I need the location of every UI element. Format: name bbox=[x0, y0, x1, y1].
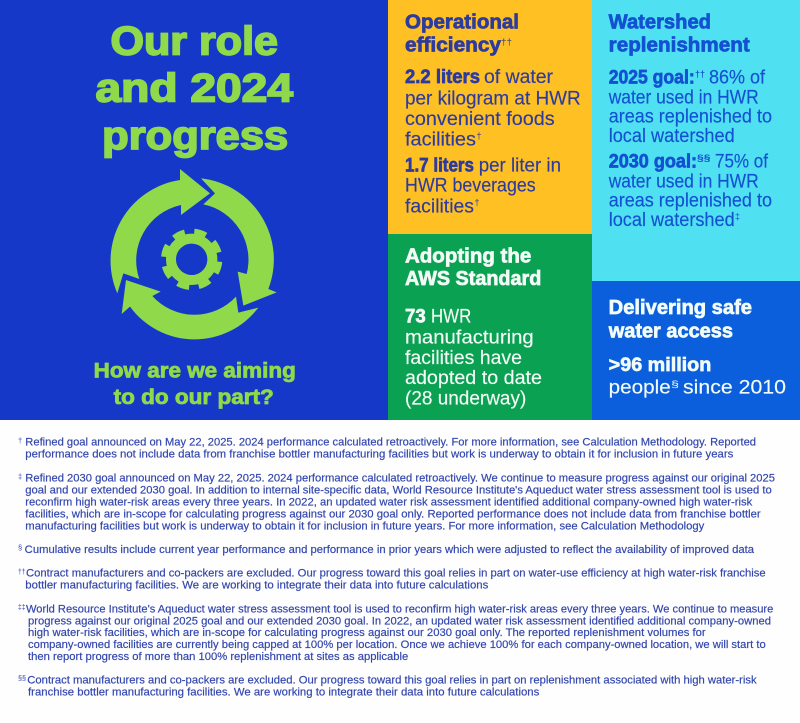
title: progress bbox=[102, 114, 288, 158]
text: people reached bbox=[609, 355, 786, 398]
title bbox=[96, 19, 294, 158]
heading: watershed replenishment bbox=[609, 11, 750, 57]
text: 2030 goal: §§ bbox=[697, 153, 710, 163]
text: facilities adopted: HWR bbox=[431, 306, 471, 327]
footnotes bbox=[18, 436, 775, 698]
footnote: aqueduct tool: World Resource Institute's Aqueduct water stress assessment tool is used to reconfirm high water-risk areas every three years. We continue to measure bbox=[26, 603, 773, 615]
footnote: refined 2030 goal: goal and our extended 2030 goal. In addition to internal site-specific data, World Resource Institute's Aqueduct water stress assessment tool is used to bbox=[25, 484, 772, 496]
text: people reached: § bbox=[671, 379, 679, 389]
text: people reached: >96 million bbox=[609, 355, 711, 376]
footnote: cumulative results: Cumulative results include current year performance and performance in prior years which were adjusted to reflect the availability of improved data bbox=[25, 544, 754, 556]
text: convenient foods metric: per kilogram at HWR bbox=[405, 88, 581, 109]
text: 2030 goal bbox=[608, 151, 772, 231]
heading: watershed replenishment: replenishment bbox=[609, 35, 750, 57]
footnote: contract manufacturers, efficiency bbox=[18, 567, 766, 591]
footnote: cumulative results: § bbox=[18, 543, 22, 552]
heading: adopting the AWS standard: AWS Standard bbox=[405, 268, 541, 290]
footnote: aqueduct tool: ‡‡ bbox=[18, 602, 26, 612]
text: 2030 goal: local watershed bbox=[609, 210, 735, 231]
footnote: refined goal: † bbox=[18, 436, 22, 445]
title: Our role bbox=[110, 19, 278, 63]
text: convenient foods metric: convenient foods bbox=[405, 109, 555, 130]
heading: operational efficiency: efficiency bbox=[405, 35, 502, 57]
icon: left arrow bbox=[111, 169, 210, 293]
footnote: contract manufacturers, replenishment: franchise bottler manufacturing facilities. We are working to integrate their data into future calculations bbox=[28, 686, 539, 698]
text: facilities adopted bbox=[405, 306, 542, 409]
footnote: contract manufacturers, replenishment: Contract manufacturers and co-packers are excluded. Our progress toward this goal relies in part on replenishment associated with high water-risk bbox=[27, 674, 757, 686]
footnote: aqueduct tool: company-owned facilities are currently being capped at 100% per location. Once we achieve 100% for each company-owned location, we will start to bbox=[28, 639, 766, 651]
text: facilities adopted: 73 bbox=[405, 306, 426, 327]
text: convenient foods metric: † bbox=[476, 131, 482, 141]
text: beverages metric: per liter in bbox=[479, 156, 561, 177]
text: facilities adopted: adopted to date bbox=[405, 368, 542, 389]
text: 2030 goal: 75% of bbox=[715, 151, 769, 172]
panel: watershed replenishment bbox=[592, 0, 800, 281]
subheading: How are we aiming bbox=[94, 359, 296, 383]
text: facilities adopted: facilities have bbox=[405, 348, 522, 369]
icon: bottom arrow bbox=[122, 280, 258, 339]
text: 2025 goal: 2025 goal: bbox=[609, 67, 695, 88]
footnote: contract manufacturers, efficiency: Contract manufacturers and co-packers are excluded. Our progress toward this goal relies in part on water-use efficiency at high water-risk franchise bbox=[26, 568, 766, 580]
text: people reached: since 2010 bbox=[683, 377, 786, 398]
text: 2025 goal: †† bbox=[695, 69, 705, 79]
text: beverages metric: 1.7 liters bbox=[405, 156, 474, 177]
text: facilities adopted: (28 underway) bbox=[405, 388, 526, 409]
text: 2030 goal: areas replenished to bbox=[609, 191, 772, 212]
icon: circular arrows with gear bbox=[111, 169, 277, 339]
footnote: refined goal: Refined goal announced on May 22, 2025. 2024 performance calculated retroactively. For more information, see Calculation Methodology. Reported bbox=[25, 437, 756, 449]
text: convenient foods metric: of water bbox=[484, 67, 554, 88]
text: 2025 goal: water used in HWR bbox=[608, 87, 759, 108]
text: beverages metric: † bbox=[474, 198, 480, 208]
text: facilities adopted: manufacturing bbox=[405, 327, 534, 348]
footnote: contract manufacturers, efficiency: †† bbox=[18, 567, 26, 576]
subheading: to do our part? bbox=[114, 385, 274, 409]
text: convenient foods metric bbox=[405, 67, 581, 151]
footnote: refined 2030 goal: Refined 2030 goal announced on May 22, 2025. 2024 performance calculated retroactively. We continue to measure progress against our original 2025 bbox=[25, 473, 775, 485]
heading: delivering safe water access: water access bbox=[608, 320, 733, 342]
icon: gear bbox=[162, 230, 221, 289]
text: beverages metric: facilities bbox=[405, 196, 474, 217]
text: convenient foods metric: facilities bbox=[405, 130, 476, 151]
text: 2030 goal: ‡ bbox=[735, 212, 740, 222]
text: beverages metric bbox=[405, 156, 561, 217]
text: 2030 goal: water used in HWR bbox=[608, 171, 759, 192]
subheading bbox=[94, 359, 296, 409]
footnote: refined 2030 goal: ‡ bbox=[18, 472, 22, 481]
footnote: aqueduct tool: then report progress of more than 100% replenishment at sites as applicable bbox=[28, 651, 408, 663]
panel: our role and 2024 progress bbox=[0, 0, 388, 420]
text: beverages metric: HWR beverages bbox=[405, 176, 536, 197]
heading: delivering safe water access bbox=[608, 297, 752, 342]
heading: watershed replenishment: Watershed bbox=[609, 11, 711, 33]
heading: operational efficiency: †† bbox=[501, 37, 512, 47]
text: 2025 goal bbox=[608, 67, 772, 147]
footnote: refined goal: performance does not include data from franchise bottler manufacturing facilities but work is underway to obtain it for inclusion in future years bbox=[25, 449, 733, 461]
text: people reached: people bbox=[609, 377, 671, 398]
heading: operational efficiency bbox=[405, 11, 519, 57]
heading: delivering safe water access: Delivering safe bbox=[609, 297, 752, 319]
panel: adopting the AWS standard bbox=[388, 234, 592, 420]
heading: adopting the AWS standard bbox=[405, 246, 541, 290]
footnote: contract manufacturers, efficiency: bottler manufacturing facilities. We are working to integrate their data into future calculations bbox=[25, 579, 488, 591]
footnote: refined 2030 goal: manufacturing facilities but work is underway to obtain it for inclusion in future years. For more information, see Calculation Methodology bbox=[25, 520, 705, 532]
footnote: refined 2030 goal: facilities, which are in-scope for calculating progress against our 2030 goal only. Reported performance does not include data from franchise bottler bbox=[25, 508, 761, 520]
text: 2025 goal: 86% of bbox=[709, 67, 766, 88]
text: convenient foods metric: 2.2 liters bbox=[405, 67, 480, 88]
panel: operational efficiency bbox=[388, 0, 592, 234]
footnote: aqueduct tool bbox=[18, 602, 773, 663]
text: 2025 goal: areas replenished to bbox=[609, 107, 772, 128]
footnote: contract manufacturers, replenishment: §§ bbox=[18, 674, 26, 682]
heading: operational efficiency: Operational bbox=[405, 11, 519, 33]
footnote: refined goal bbox=[18, 436, 756, 461]
footnote: refined 2030 goal bbox=[18, 472, 775, 532]
panel: delivering safe water access bbox=[592, 281, 800, 420]
title: and 2024 bbox=[96, 67, 294, 111]
footnote: aqueduct tool: high water-risk facilities, which are in-scope for calculating progress against our 2030 goal only. The reported replenishment volumes for bbox=[28, 627, 706, 639]
footnote: contract manufacturers, replenishment bbox=[18, 674, 757, 698]
heading: adopting the AWS standard: Adopting the bbox=[405, 246, 531, 268]
footnote: refined 2030 goal: reconfirm high water-risk areas every three years. In 2022, an updated water risk assessment identified additional company-owned high water-risk bbox=[25, 496, 753, 508]
text: 2030 goal: 2030 goal: bbox=[609, 151, 697, 172]
footnote: aqueduct tool: progress against our original 2025 goal and our extended 2030 goal. In 2022, an updated water risk assessment identified additional company-owned bbox=[28, 615, 771, 627]
icon: right arrow bbox=[201, 178, 277, 306]
text: 2025 goal: local watershed bbox=[609, 126, 735, 147]
